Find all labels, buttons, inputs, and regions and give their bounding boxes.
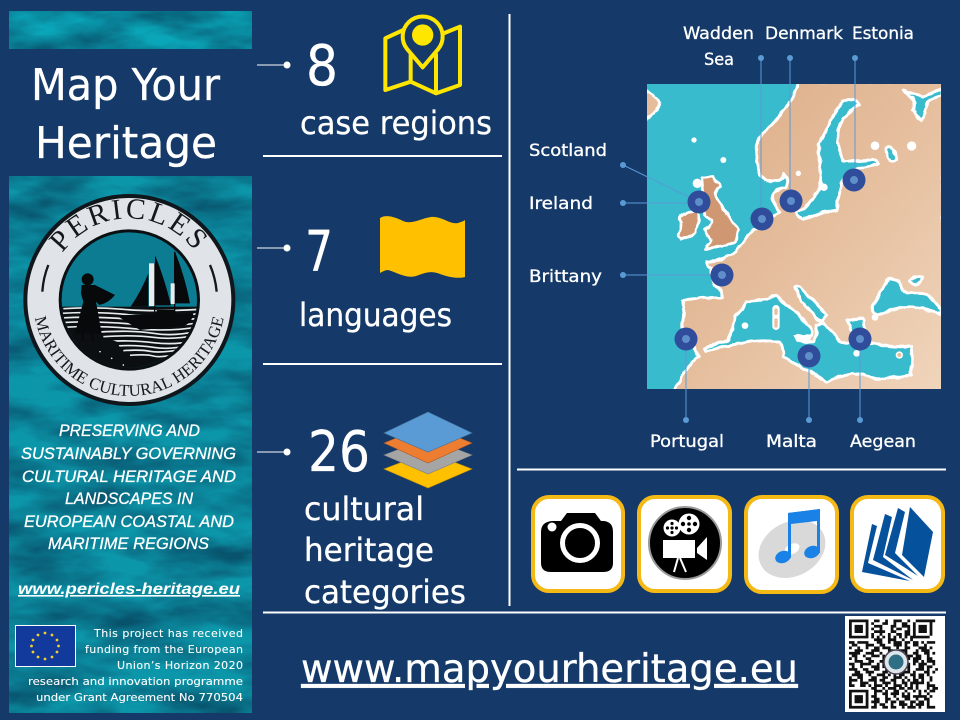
- map labels: Scotland: [529, 141, 607, 160]
- ship: [117, 252, 193, 330]
- title: Heritage: [35, 118, 217, 169]
- logo ring text: PERICLES: [48, 199, 207, 252]
- Baltic: [797, 100, 877, 219]
- project description: MARITIME REGIONS: [48, 535, 209, 553]
- project description: [21, 422, 236, 553]
- icon: EU flag: [16, 626, 76, 666]
- map label dots: [620, 55, 863, 423]
- map labels: Malta: [766, 432, 817, 451]
- funding statement: research and innovation programme: [28, 675, 243, 688]
- stat: 7 languages: [257, 216, 465, 334]
- map labels: [529, 24, 916, 451]
- panel: media types: [533, 497, 943, 592]
- footer website link: www.mapyourheritage.eu: [301, 647, 798, 692]
- dividers: [263, 14, 946, 612]
- stat: 26 cultural heritage categories: cultural: [304, 490, 424, 528]
- top water strip: [9, 11, 252, 49]
- project website link: www.pericles-heritage.eu: [18, 581, 240, 598]
- connector arrow: [257, 62, 290, 68]
- map labels: Estonia: [852, 24, 914, 43]
- icon: layers: [384, 412, 472, 488]
- title: Map Your: [31, 60, 221, 111]
- project description: PRESERVING AND: [59, 422, 200, 440]
- stat: 7 languages: 7: [305, 220, 333, 285]
- stat: 8 case regions: [257, 16, 492, 142]
- Mediterranean: [705, 296, 912, 382]
- project description: LANDSCAPES IN: [65, 490, 193, 508]
- funding statement: funding from the European: [85, 643, 243, 656]
- Iceland: [643, 90, 660, 120]
- map labels: Wadden: [683, 24, 754, 43]
- icon: film camera: [639, 497, 730, 591]
- connector arrow: [257, 244, 290, 252]
- logo scene: [62, 306, 196, 368]
- map labels: Aegean: [850, 432, 916, 451]
- map leader lines: [623, 58, 860, 420]
- project description: EUROPEAN COASTAL AND: [24, 513, 234, 531]
- funding statement: This project has received: [93, 627, 243, 640]
- map markers: [674, 168, 872, 368]
- title: [31, 60, 221, 169]
- stat: 8 case regions: case regions: [300, 104, 492, 142]
- project description: CULTURAL HERITAGE AND: [22, 468, 236, 486]
- QR code: [845, 616, 945, 712]
- stat: 7 languages: languages: [299, 296, 452, 334]
- Adriatic: [794, 286, 827, 323]
- map labels: Brittany: [529, 267, 602, 286]
- funding statement: Union’s Horizon 2020: [117, 659, 243, 672]
- map labels: Sea: [704, 50, 734, 69]
- icon: books: [852, 497, 943, 591]
- watercolour map of Europe: [643, 82, 943, 392]
- Black Sea: [873, 279, 942, 315]
- map labels: Ireland: [529, 194, 593, 213]
- project description: SUSTAINABLY GOVERNING: [21, 445, 236, 463]
- mainland: [675, 82, 943, 392]
- stat: 26 cultural heritage categories: categories: [304, 573, 466, 611]
- White Sea: [903, 87, 942, 121]
- funding statement: under Grant Agreement No 770504: [36, 691, 243, 704]
- map labels: Portugal: [650, 432, 724, 451]
- icon: camera: [533, 497, 623, 591]
- panel: map of case regions: [529, 24, 943, 451]
- connector arrow: [257, 448, 290, 456]
- stat: 8 case regions: 8: [306, 34, 338, 99]
- woman silhouette: [75, 273, 115, 341]
- icon: flag: [380, 216, 465, 278]
- logo: Pericles Maritime Cultural Heritage: [23, 194, 236, 406]
- logo: Pericles Maritime Cultural Heritage: MARITIME CULTURAL HERITAGE: [34, 316, 224, 396]
- map labels: Denmark: [765, 24, 843, 43]
- stat: 26 cultural heritage categories: 26: [308, 420, 370, 485]
- funding statement: [28, 627, 243, 704]
- stat: 26 cultural heritage categories: [257, 412, 472, 611]
- icon: music disc: [746, 497, 837, 592]
- panel: Pericles project sidebar: [9, 176, 252, 713]
- stat: 26 cultural heritage categories: heritage: [304, 531, 434, 569]
- islands: [691, 137, 916, 359]
- Ireland and Britain: [678, 211, 699, 239]
- icon: map with pin: [385, 16, 460, 93]
